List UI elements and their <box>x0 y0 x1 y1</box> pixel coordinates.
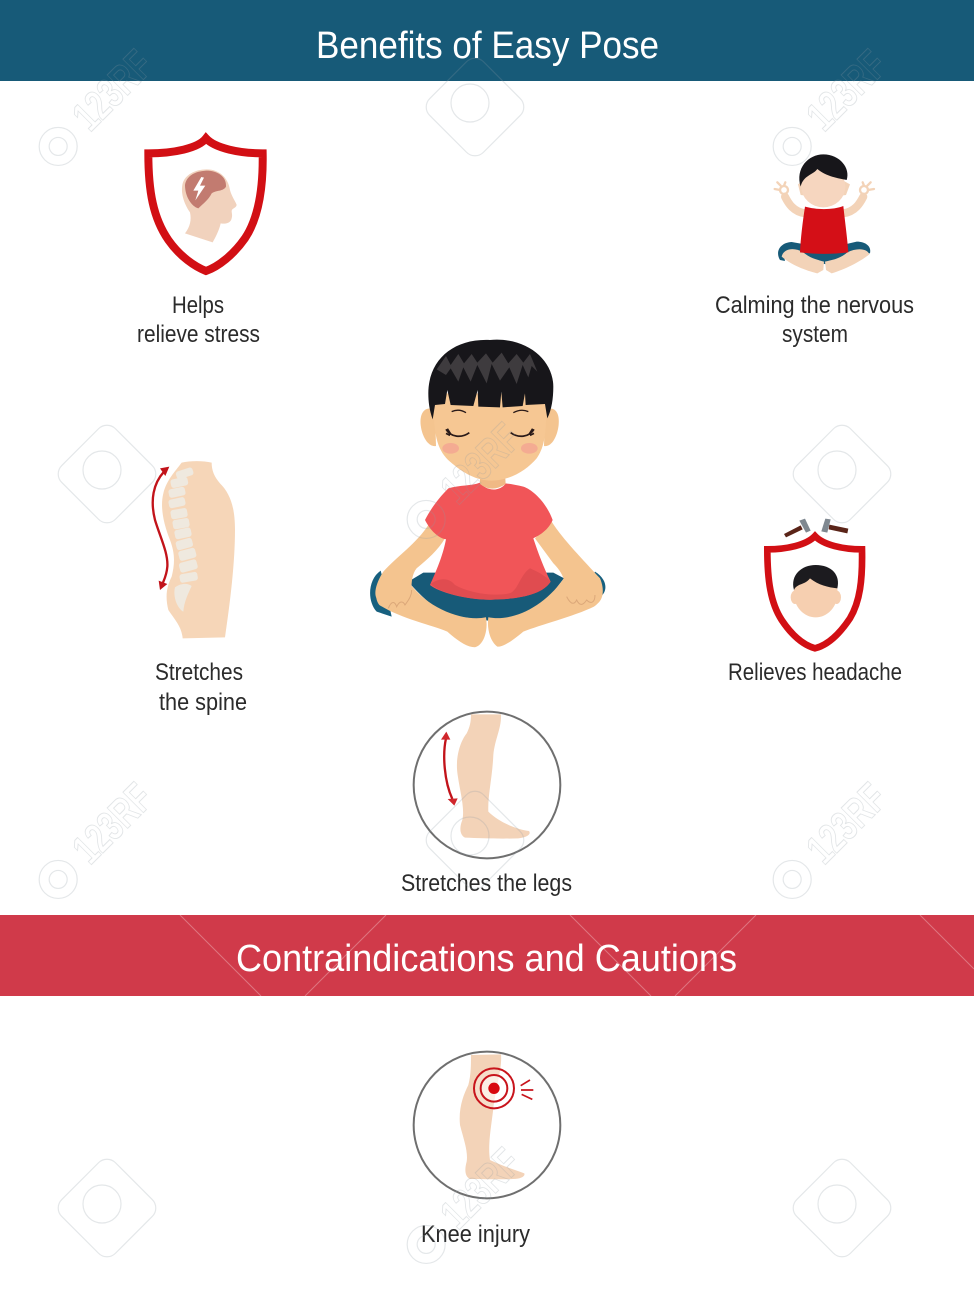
label: relieves headache: Relieves headache <box>728 659 902 686</box>
label: calming the nervous system: Calming the nervous <box>715 292 914 319</box>
shirt <box>425 483 553 600</box>
icon: small meditating figure <box>775 154 874 273</box>
neck <box>480 473 506 489</box>
arms <box>375 525 445 608</box>
hair <box>428 340 553 419</box>
label: knee injury: Knee injury <box>421 1221 530 1248</box>
label: stretches the legs: Stretches the legs <box>401 870 572 897</box>
title: Benefits of Easy Pose <box>316 25 659 67</box>
label: helps relieve stress: Helps <box>172 292 224 319</box>
icon: knee injury circle <box>414 1052 560 1198</box>
header band: contraindications <box>0 915 974 996</box>
label: calming the nervous system <box>715 292 914 348</box>
watermark overlay: 123RF <box>431 1139 529 1237</box>
label: calming the nervous system: system <box>782 321 848 348</box>
icon: stress shield <box>148 138 263 271</box>
legs <box>376 573 487 647</box>
cheeks <box>442 443 459 454</box>
red stretch arrow <box>153 467 169 590</box>
label: helps relieve stress: relieve stress <box>137 321 260 348</box>
eyes and brows <box>446 429 469 436</box>
label: stretches the spine: the spine <box>159 689 247 716</box>
watermark overlay: 123RF <box>63 774 161 872</box>
label: stretches the spine <box>155 659 247 716</box>
label: stretches the spine: Stretches <box>155 659 243 686</box>
shorts behind legs <box>370 571 605 617</box>
title: Contraindications and Cautions <box>236 938 737 980</box>
watermark overlay: 123RF <box>431 414 529 512</box>
illustration: child in easy pose <box>370 340 605 647</box>
red stretch arrow <box>441 732 458 806</box>
pain target <box>474 1068 533 1108</box>
ears <box>420 409 436 446</box>
watermark overlay: 123RF <box>63 41 161 139</box>
hammers <box>784 519 848 537</box>
face <box>434 393 546 481</box>
icon: legs circle <box>414 712 560 858</box>
header band: benefits <box>0 0 974 81</box>
icon: headache shield <box>767 519 862 648</box>
watermark overlay: 123RF <box>797 41 895 139</box>
label: helps relieve stress <box>137 292 260 348</box>
icon: spine <box>153 461 235 638</box>
watermark overlay: 123RF <box>797 774 895 872</box>
